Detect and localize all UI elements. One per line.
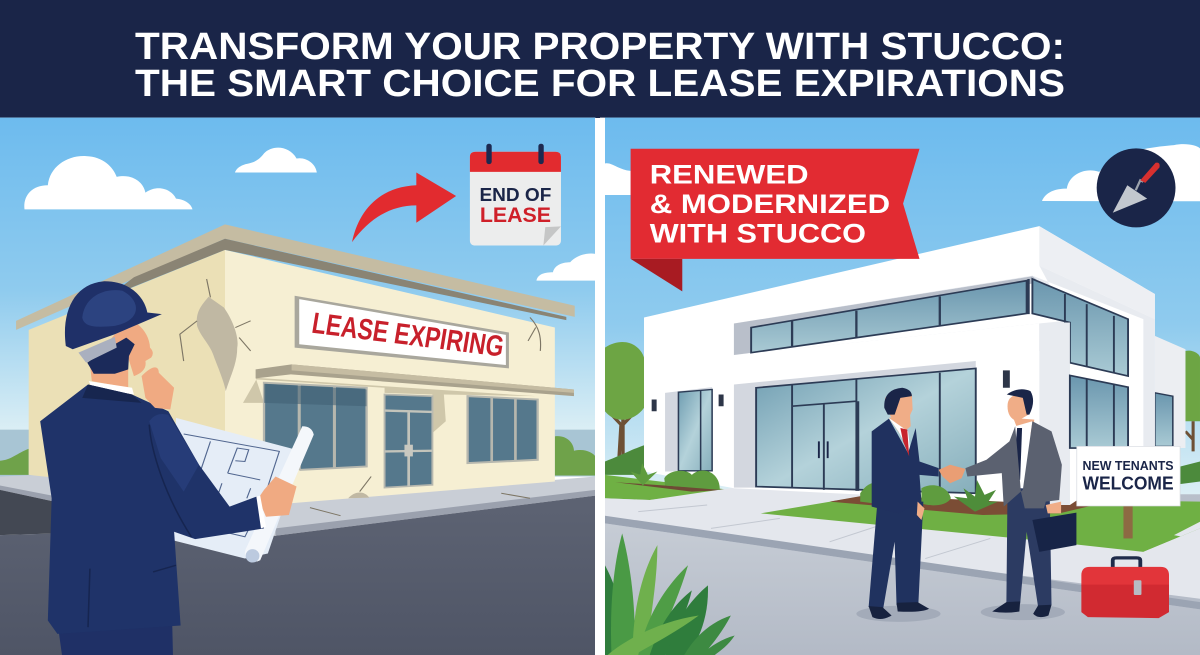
blueprint	[172, 418, 314, 563]
plant: foreground leaves	[605, 533, 735, 655]
shrubs	[631, 463, 998, 512]
panel: after, renewed building	[600, 118, 1200, 655]
sign: new tenants welcome	[1077, 446, 1180, 538]
sidewalks and lawn	[605, 475, 730, 500]
trousers	[57, 622, 173, 655]
jacket	[40, 384, 264, 634]
calendar: end of lease: LEASE	[480, 203, 551, 227]
road	[0, 496, 595, 655]
white pier	[1039, 323, 1070, 505]
calendar: end of lease	[470, 146, 561, 246]
right window	[468, 396, 538, 463]
helmet	[65, 281, 162, 349]
banner: renewed and modernized	[631, 149, 920, 291]
trees	[605, 342, 1200, 485]
main white	[644, 226, 1155, 505]
hands	[142, 367, 174, 410]
bushes	[0, 436, 595, 476]
icon: trowel badge	[1097, 148, 1176, 227]
panel: before, lease expiring	[0, 118, 595, 655]
title banner: THE SMART CHOICE FOR LEASE EXPIRATIONS	[135, 63, 1065, 105]
awning	[256, 364, 574, 396]
sidewalk	[0, 475, 595, 535]
arrow: to calendar	[352, 173, 456, 242]
neck and head	[90, 324, 153, 388]
entrance recess	[734, 361, 976, 488]
sign: new tenants welcome: NEW TENANTS	[1083, 459, 1174, 473]
wall lamps	[652, 370, 1010, 411]
upper window band	[751, 281, 1027, 353]
icon: handshake	[939, 465, 965, 483]
awning shadow	[243, 378, 536, 433]
roof	[16, 224, 575, 330]
door	[385, 394, 432, 488]
lower cracks	[348, 493, 369, 498]
banner: renewed and modernized: & MODERNIZED	[650, 190, 890, 220]
title banner: TRANSFORM YOUR PROPERTY WITH STUCCO:	[135, 26, 1065, 68]
building: LEASE EXPIRING	[310, 306, 506, 363]
title banner	[0, 0, 1200, 118]
briefcase	[1032, 513, 1076, 552]
building	[644, 226, 1185, 505]
sign: new tenants welcome: WELCOME	[1083, 474, 1174, 494]
left window	[665, 387, 712, 471]
cloud: right	[536, 253, 595, 281]
lower side windows	[1070, 375, 1128, 448]
cloud: small	[235, 148, 317, 173]
building	[16, 224, 575, 516]
wall crack	[197, 297, 238, 391]
calendar: end of lease: END OF	[479, 185, 552, 206]
banner: renewed and modernized: WITH STUCCO	[650, 219, 866, 249]
divider	[595, 118, 605, 655]
upper side windows	[1032, 279, 1128, 376]
banner: renewed and modernized: RENEWED	[650, 160, 809, 190]
person: man in gray suit	[965, 389, 1076, 620]
clouds	[605, 144, 1200, 201]
person: man in navy suit	[856, 388, 941, 622]
left windows	[264, 383, 367, 470]
person: surveyor	[40, 281, 297, 655]
annex	[1155, 336, 1185, 448]
cloud: large	[24, 156, 192, 209]
sign	[295, 296, 509, 368]
icon: toolbox	[1081, 558, 1169, 618]
